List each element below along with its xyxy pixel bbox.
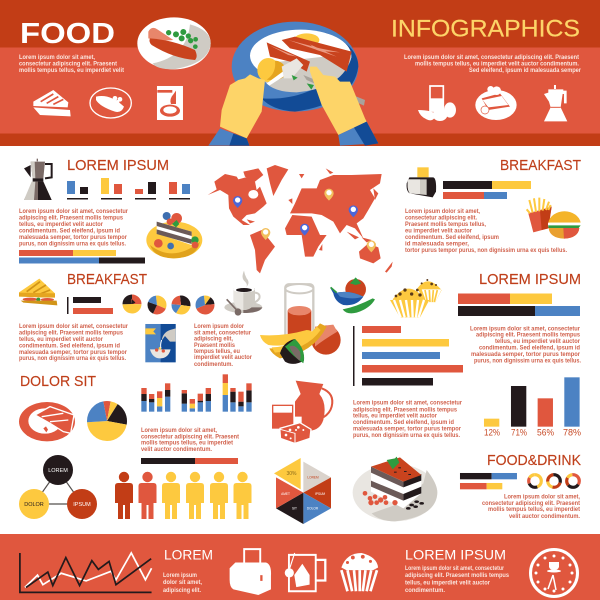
heading: LOREM IPSUM [479, 271, 581, 288]
text block: condimentum. Sed eleifend, ipsum id [19, 229, 120, 235]
icon: pitcher, glass and cheese [272, 381, 332, 443]
text block: Lorem ipsum dolor sit amet, consectetur [19, 324, 129, 330]
text block: purus, non dignissim urna ex quis tellus. [474, 358, 581, 364]
hexagon chart: 30% [286, 471, 297, 477]
stacked bars [460, 473, 517, 489]
icon: toaster [407, 167, 436, 197]
text block: adipiscing elit. Praesent mollis tempus [19, 330, 124, 336]
text block centre: tempus tellus, eu [194, 349, 240, 355]
mini bars [67, 297, 113, 314]
text block: Lorem ipsum dolor sit amet, [504, 494, 580, 500]
header text right: Sed eleifend, ipsum id malesuada semper [469, 68, 582, 74]
heading: DOLOR SIT [20, 373, 96, 390]
text block: id malesuada semper, [405, 241, 469, 247]
icon: meat plate [19, 402, 75, 441]
mini bar chart [67, 178, 190, 200]
text block: malesuada semper, tortor purus tempor [19, 350, 128, 356]
footer band [0, 534, 600, 600]
text block: condimentum. Sed eleifend, ipsum id [479, 345, 580, 351]
icon: juice glass and fruit [260, 284, 341, 364]
text block: purus, non dignissim urna ex quis tellus. [19, 241, 126, 247]
icon: fries and burger [527, 198, 581, 239]
text block: eu imperdiet velit auctor [405, 229, 473, 235]
hexagon chart [274, 458, 331, 524]
section: breakfast right [405, 157, 581, 254]
icon: coffee pot [544, 85, 567, 121]
stacked bars [19, 250, 145, 264]
text block: Lorem ipsum dolor sit amet, [405, 209, 480, 215]
column chart with percentages: 71% [511, 428, 527, 438]
footer heading: lorem ipsum: LOREM IPSUM [405, 546, 506, 562]
text block centre: adipiscing elit, [194, 337, 233, 343]
icon: cereal box [157, 86, 183, 120]
world map [208, 165, 393, 273]
footer text left [163, 573, 202, 594]
network diagram [19, 455, 97, 519]
icon: sandwich [33, 90, 71, 116]
pie charts [127, 299, 210, 310]
hexagon chart: IPSUM [315, 492, 325, 496]
text block: velit auctor condimentum. [509, 514, 580, 520]
text block: mollis tempus tellus, eu imperdiet [488, 507, 580, 513]
text block [470, 326, 581, 364]
section: lorem ipsum right [458, 271, 581, 364]
text block [19, 209, 129, 247]
line chart [20, 553, 152, 592]
text block: consectetur adipiscing elit. Praesent [482, 501, 580, 507]
map pins [233, 189, 376, 252]
text block centre right: tellus, eu imperdiet velit auctor [353, 414, 438, 420]
title: food: FOOD [20, 18, 115, 50]
network diagram: LOREM [48, 468, 68, 474]
text block: condimentum. Sed eleifend, ipsum [405, 235, 499, 241]
icon: sausage plate [137, 17, 211, 69]
footer text left: Lorem ipsum [163, 573, 197, 579]
text block centre right: purus, non dignissim urna ex quis tellus. [353, 433, 460, 439]
text block below columns [141, 428, 239, 453]
text block [482, 494, 580, 520]
hexagon chart: AMET [281, 492, 290, 496]
footer text right: tellus, eu imperdiet velit auctor [405, 580, 491, 586]
text block: tellus, eu imperdiet velit auctor [19, 222, 104, 228]
text block: consectetur adipiscing elit. [405, 216, 477, 222]
header text left: consectetur adipiscing elit. Praesent [19, 62, 117, 68]
text block: tortor purus tempor purus, non dignissim urna ex quis tellus. [405, 248, 567, 254]
text block centre [194, 324, 253, 368]
icon: moka pot [24, 159, 52, 200]
text block: condimentum. Sed eleifend, ipsum id [19, 343, 120, 349]
title: infographics: INFOGRAPHICS [391, 16, 580, 42]
text block centre: imperdiet velit auctor [194, 355, 253, 361]
footer text right: adipiscing elit. Praesent mollis tempus [405, 573, 510, 579]
text block below columns: velit auctor condimentum. [141, 447, 212, 453]
hexagon chart: LOREM [307, 476, 319, 480]
text block centre right: adipiscing elit. Praesent mollis tempus [353, 407, 458, 413]
text block [19, 324, 129, 362]
donut charts [529, 475, 579, 487]
header text right: Lorem ipsum dolor sit amet, consectetur adipiscing elit. Praesent [404, 55, 579, 61]
people pictogram [115, 472, 252, 519]
column chart with percentages: 56% [537, 428, 554, 438]
icon: tomato and vegetables [330, 277, 375, 313]
text block centre: Praesent mollis [194, 343, 236, 349]
header text left: mollis tempus tellus, eu imperdiet velit [19, 68, 124, 74]
icon: tiramisu cake [353, 457, 437, 521]
column chart with percentages [484, 377, 581, 438]
section: breakfast left [19, 271, 253, 368]
footer text left: adipiscing elit. [163, 588, 201, 594]
icon: juice glass and fruit [418, 86, 456, 121]
text block: adipiscing elit. Praesent mollis tempus [19, 216, 124, 222]
hexagon chart: DOLOR [307, 506, 319, 510]
text block: tellus, eu imperdiet velit auctor [495, 339, 581, 345]
icon: toaster outline [230, 549, 271, 595]
footer text right: condimentum. [405, 588, 445, 594]
footer heading: lorem: LOREM [164, 546, 213, 562]
text block: tellus, eu imperdiet velit auctor [19, 337, 104, 343]
horizontal bar chart [353, 326, 463, 386]
heading: FOOD&DRINK [487, 452, 581, 469]
header text right: mollis tempus tellus, eu imperdiet velit auctor condimentum. [415, 62, 579, 68]
text block below columns: Lorem ipsum dolor sit amet, [141, 428, 217, 434]
text block: Lorem ipsum dolor sit amet, consectetur [470, 326, 581, 332]
section: food and drink [460, 452, 581, 520]
footer text right [405, 566, 510, 594]
icon: sandwich [19, 279, 57, 305]
text block [405, 209, 567, 254]
icon: muffin [341, 553, 378, 591]
text block: malesuada semper, tortor purus tempor [471, 352, 581, 358]
column chart with percentages: 78% [563, 428, 581, 438]
heading: LOREM IPSUM [67, 157, 169, 174]
hexagon chart: SIT [292, 506, 297, 510]
header band [0, 0, 600, 146]
section: dolor sit [19, 373, 251, 519]
footer text right: Lorem ipsum dolor sit amet, consectetur [405, 566, 505, 572]
stacked bars [458, 294, 580, 316]
icon: sausage plate outline [90, 88, 131, 118]
text block: purus, non dignissim urna ex quis tellus. [19, 356, 126, 362]
text block below columns: mollis tempus tellus, eu imperdiet [141, 441, 233, 447]
header text left: Lorem ipsum dolor sit amet, [19, 55, 95, 61]
stacked column charts [141, 374, 252, 412]
heading: BREAKFAST [67, 271, 147, 288]
text block centre right: Lorem ipsum dolor sit amet, consectetur [353, 401, 463, 407]
text block: Lorem ipsum dolor sit amet, consectetur [19, 209, 129, 215]
text block centre right: condimentum. Sed eleifend, ipsum id [353, 420, 454, 426]
icon: cereal box [145, 324, 176, 362]
header text left [19, 55, 124, 74]
stacked bars [443, 181, 531, 199]
network diagram: DOLOR [24, 502, 44, 508]
text block: adipiscing elit. Praesent mollis tempus [476, 333, 581, 339]
heading: BREAKFAST [500, 157, 581, 174]
text block centre right: malesuada semper, tortor purus tempor [353, 427, 462, 433]
icon: cake plate [475, 86, 517, 120]
text block: Praesent mollis tempus tellus, [405, 222, 486, 228]
column chart with percentages: 12% [484, 428, 500, 438]
icon: cake with berries [146, 212, 202, 258]
header text right [404, 55, 582, 74]
text block centre: sit amet, consectetur [194, 330, 252, 336]
section: lorem ipsum top left [19, 157, 202, 264]
icon: tea cup [285, 553, 325, 591]
icon: muffins [390, 279, 442, 317]
text block centre: Lorem ipsum dolor [194, 324, 245, 330]
text block: malesuada semper, tortor purus tempor [19, 235, 128, 241]
network diagram: IPSUM [73, 502, 91, 508]
pie chart [97, 411, 117, 431]
text block centre right [353, 401, 463, 439]
progress bar [141, 458, 238, 464]
footer text left: dolor sit amet, [163, 580, 202, 586]
icon: main plate with hands [208, 22, 378, 146]
icon: coffee cup [224, 271, 262, 316]
text block below columns: consectetur adipiscing elit. Praesent [141, 434, 239, 440]
icon: clock [530, 550, 578, 596]
text block centre: condimentum. [194, 362, 233, 368]
